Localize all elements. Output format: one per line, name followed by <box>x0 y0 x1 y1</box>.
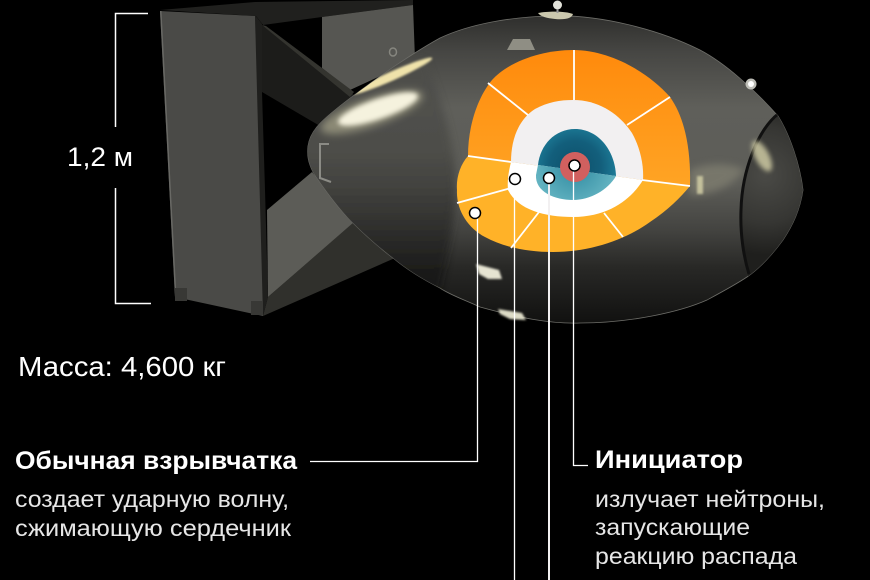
marker dots <box>470 160 580 218</box>
callout: initiator: Инициатор <box>595 446 743 474</box>
callout: conventional explosive: Обычная взрывчатка <box>15 447 298 475</box>
callout: conventional explosive: создает ударную волну, <box>15 486 289 512</box>
upper core <box>538 129 616 176</box>
rear cone shading <box>300 60 456 300</box>
nose cone <box>742 114 803 276</box>
lower tamper ring <box>508 162 643 217</box>
leader line: explosive <box>310 213 478 462</box>
top lug <box>507 0 573 50</box>
rear bracket <box>320 144 331 182</box>
lower core <box>536 165 616 200</box>
callout: conventional explosive: сжимающую сердечник <box>15 515 292 541</box>
initiator <box>560 152 590 182</box>
callout: conventional explosive <box>15 447 298 541</box>
leader line: tamper <box>514 179 516 580</box>
mass label: Масса: 4,600 кг <box>18 351 226 382</box>
segment dividers <box>457 50 690 248</box>
leader line: initiator <box>574 166 588 466</box>
callout: initiator: реакцию распада <box>595 543 797 569</box>
bottom lug two <box>498 309 526 320</box>
leader line: core <box>548 178 550 580</box>
height label: 1,2 м <box>67 142 133 172</box>
tail fin frame <box>160 0 415 316</box>
specular highlights <box>318 86 426 138</box>
side plate <box>160 11 263 316</box>
callout: initiator <box>595 446 825 569</box>
bottom lug one <box>476 264 502 279</box>
right lug <box>746 78 756 90</box>
lower explosive <box>457 156 690 252</box>
bomb body <box>300 16 820 323</box>
callout: initiator: запускающие <box>595 514 750 540</box>
upper tamper ring <box>511 100 643 180</box>
height dimension bracket <box>67 14 151 304</box>
upper explosive <box>468 50 690 186</box>
explosive shell segments <box>457 50 690 252</box>
callout: initiator: излучает нейтроны, <box>595 486 825 512</box>
